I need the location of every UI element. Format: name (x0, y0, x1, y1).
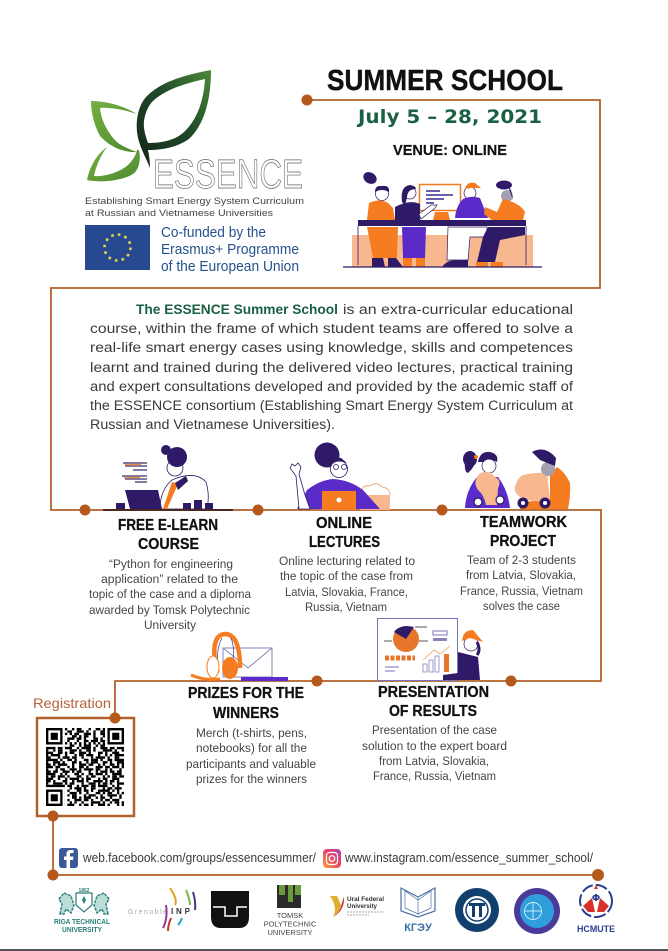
logo: Tomsk Polytechnic University: UNIVERSITY (267, 928, 313, 937)
logo: HCMUTE: HCMUTE (577, 924, 615, 935)
step: teamwork project (460, 514, 583, 613)
introduction paragraph: Russian and Vietnamese Universities). (90, 417, 335, 432)
step: prizes for the winners: Merch (t-shirts, pens, (196, 726, 307, 740)
step: free e-learn course: topic of the case and a diploma (89, 587, 251, 601)
registration label: Registration (33, 695, 111, 711)
introduction paragraph: is an extra-curricular educational (343, 302, 573, 317)
step: prizes for the winners (186, 685, 316, 786)
logo: Riga Technical University: UNIVERSITY (62, 925, 102, 934)
logo: Grenoble INP: INP (171, 907, 191, 916)
logo: Tomsk Polytechnic University: TOMSK (277, 911, 303, 920)
Erasmus+ co-funding badge (85, 225, 299, 275)
QR code panel (37, 712, 134, 822)
illustration: headset and envelope (191, 634, 288, 681)
step: presentation of results: solution to the expert board (362, 739, 507, 753)
step: presentation of results (362, 684, 507, 783)
logo: Tomsk Polytechnic University (264, 885, 317, 937)
introduction paragraph: real-life smart energy cases using knowledge, skills and competences (90, 340, 573, 355)
step: free e-learn course: “Python for engineering (109, 557, 233, 571)
step: free e-learn course: awarded by Tomsk Polytechnic (89, 603, 250, 617)
Erasmus+ co-funding badge: Co-funded by the (161, 225, 266, 241)
illustration: person at laptop (103, 445, 233, 510)
logo: black shield (211, 891, 249, 928)
dates: July 5 – 28, 2021 (356, 106, 542, 128)
introduction paragraph: course, within the frame of which student teams are offered to solve a (90, 321, 574, 336)
step: teamwork project: from Latvia, Slovakia, (466, 568, 576, 582)
step: prizes for the winners: WINNERS (213, 705, 279, 722)
logo: blue globe seal (514, 888, 560, 934)
step: prizes for the winners: prizes for the winners (196, 772, 307, 786)
step: online lectures (279, 515, 415, 614)
illustration: presentation board (378, 618, 483, 680)
venue: VENUE: ONLINE (393, 142, 507, 159)
ESSENCE logo: at Russian and Vietnamese Universities (85, 208, 273, 219)
logo: HCMUTE (577, 885, 615, 935)
illustration: teamwork (463, 450, 570, 509)
title: SUMMER SCHOOL (327, 65, 563, 97)
ESSENCE logo (85, 70, 304, 219)
step: free e-learn course: University (144, 618, 197, 632)
step: online lectures: Latvia, Slovakia, France, (285, 585, 408, 599)
logo: Ural Federal University: Ural Federal (347, 896, 384, 903)
ESSENCE logo: ESSENCE (153, 151, 303, 197)
step: free e-learn course: application” related to the (101, 572, 238, 586)
logo: Ural Federal University (330, 896, 384, 917)
step: prizes for the winners: participants and valuable (186, 757, 316, 771)
logo: HCMUTE: Φ (592, 893, 600, 904)
facebook link (59, 848, 316, 868)
timeline connector lines (48, 94, 604, 881)
step: free e-learn course (89, 517, 251, 632)
step: presentation of results: PRESENTATION (378, 684, 489, 701)
Erasmus+ co-funding badge: of the European Union (161, 259, 299, 275)
logo: Riga Technical University (54, 888, 110, 934)
step: prizes for the winners: notebooks) for all the (196, 741, 307, 755)
step: teamwork project: solves the case (483, 599, 560, 613)
step: presentation of results: Presentation of the case (372, 723, 497, 737)
logo: KGEU: КГЭУ (404, 922, 432, 934)
facebook link: web.facebook.com/groups/essencesummer/ (82, 850, 316, 865)
step: presentation of results: France, Russia, Vietnam (373, 769, 496, 783)
step: online lectures: LECTURES (309, 534, 380, 551)
bottom edge rule (0, 949, 668, 951)
Erasmus+ co-funding badge: Erasmus+ Programme (161, 242, 299, 258)
introduction paragraph: and expert consultations developed and provided by the academic staff of (90, 379, 573, 394)
logo: navy round seal (455, 888, 499, 932)
logo: Riga Technical University: RIGA TECHNICAL (54, 917, 110, 926)
introduction paragraph: The ESSENCE Summer School (136, 302, 338, 317)
ESSENCE logo: Establishing Smart Energy System Curriculum (85, 196, 304, 207)
step: presentation of results: from Latvia, Slovakia, (379, 754, 489, 768)
instagram link (323, 849, 593, 868)
step: online lectures: the topic of the case from (280, 569, 413, 583)
instagram link: www.instagram.com/essence_summer_school/ (344, 850, 593, 865)
step: free e-learn course: COURSE (138, 536, 199, 553)
logo: KGEU (401, 888, 435, 934)
logo: Riga Technical University: 1862 (78, 888, 90, 894)
step: online lectures: Online lecturing related to (279, 554, 415, 568)
step: free e-learn course: FREE E-LEARN (118, 517, 218, 534)
step: teamwork project: PROJECT (490, 533, 556, 550)
logo: Tomsk Polytechnic University: POLYTECHNIC (264, 920, 317, 928)
introduction paragraph (90, 302, 574, 432)
step: online lectures: ONLINE (316, 515, 372, 532)
step: teamwork project: Team of 2-3 students (467, 553, 576, 567)
step: teamwork project: France, Russia, Vietnam (460, 584, 583, 598)
illustration: team at a table (343, 170, 542, 267)
logo: Ural Federal University: University (347, 903, 377, 910)
step: prizes for the winners: PRIZES FOR THE (188, 685, 304, 702)
introduction paragraph: the ESSENCE consortium (Establishing Smart Energy System Curriculum at (90, 398, 573, 413)
introduction paragraph: learnt and trained during the delivered video lectures, practical training (90, 360, 573, 375)
step: presentation of results: OF RESULTS (389, 703, 477, 720)
step: teamwork project: TEAMWORK (480, 514, 567, 531)
logo: Grenoble INP (128, 888, 195, 931)
logo: Grenoble INP: Grenoble (128, 909, 167, 916)
illustration: online lecturer (290, 442, 390, 510)
step: online lectures: Russia, Vietnam (305, 600, 387, 614)
